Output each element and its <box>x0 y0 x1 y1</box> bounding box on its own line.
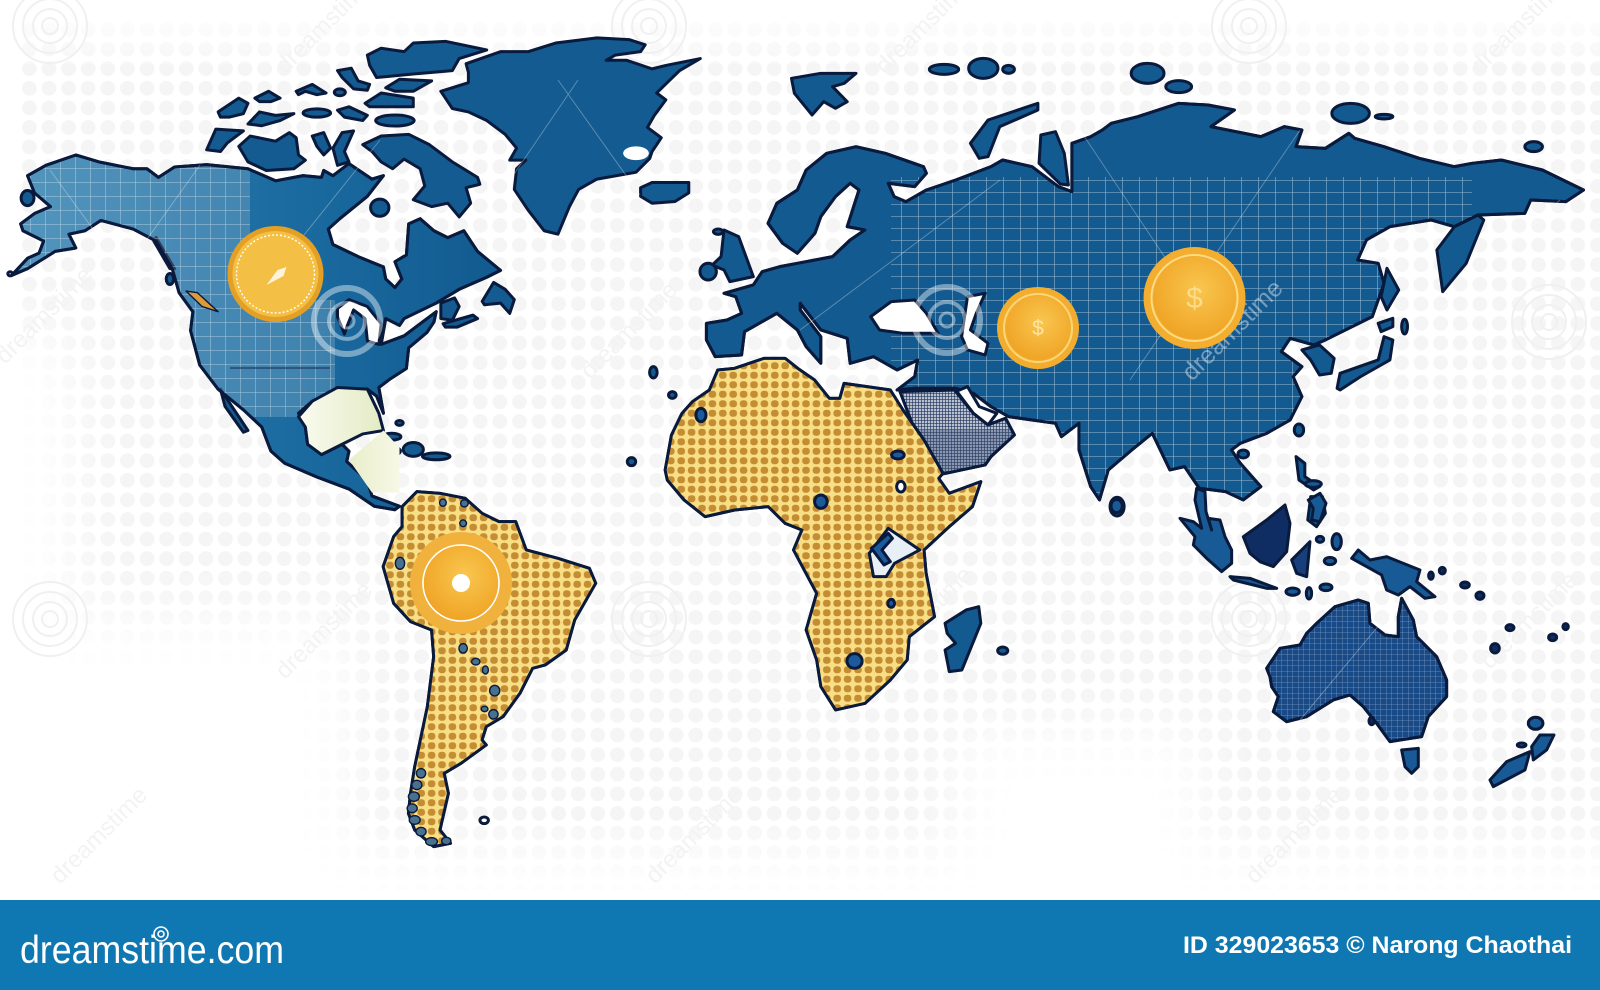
Africa dotted pattern <box>666 360 978 708</box>
Inland seas over Eurasia <box>706 103 1584 500</box>
coin: East Asia: $ <box>1186 282 1203 315</box>
Arabian peninsula hatch <box>902 392 1012 472</box>
South Asian islands <box>1110 424 1325 527</box>
New Zealand <box>1490 717 1554 787</box>
Newfoundland and maritime islands <box>441 282 514 327</box>
Australia outline <box>1267 598 1447 742</box>
Great Lakes <box>338 300 381 344</box>
watermark text on background: dreamstime <box>1475 566 1583 674</box>
South American small markers <box>395 499 500 846</box>
Arctic Eurasian islands <box>791 58 1542 152</box>
Greenland <box>441 38 700 234</box>
Australia <box>1267 598 1447 742</box>
mainland North America <box>11 155 501 510</box>
Baffin Island <box>363 134 480 217</box>
Yamal peninsula <box>1039 132 1068 185</box>
watermark text on Eurasia: dreamstime <box>1176 274 1289 386</box>
Africa and South America details <box>383 358 1008 847</box>
Australia fine grid <box>1269 602 1446 740</box>
South America dotted pattern <box>384 493 594 844</box>
coin: Central Asia <box>997 287 1079 369</box>
North America outline and Great Lakes <box>11 146 649 510</box>
Sulawesi <box>1292 542 1310 577</box>
watermark spiral on North America <box>314 288 380 354</box>
continent: North America and Greenland <box>8 38 700 510</box>
Caspian Sea <box>962 293 988 355</box>
Sumatra and Malay peninsula <box>1180 488 1232 572</box>
South America outline <box>383 492 596 847</box>
Central America cream region <box>349 431 400 492</box>
watermark text on background: dreamstime <box>1240 781 1348 889</box>
watermark text on background: dreamstime <box>45 781 153 889</box>
Arabia outline <box>900 390 1014 475</box>
Black Sea <box>871 300 938 333</box>
coin: Central Asia: $ <box>1032 317 1044 340</box>
coin: North America <box>228 226 324 322</box>
watermark spirals on background <box>13 0 1586 656</box>
Ocean islands <box>480 367 1008 824</box>
Southeast Asia and Oceania <box>1111 481 1568 787</box>
Lesser Sunda islands <box>1111 499 1332 599</box>
footer logo text: dreamstime.com <box>20 929 284 972</box>
Orange west coast mark <box>186 291 218 312</box>
British Isles <box>700 229 753 282</box>
Tasmania <box>1402 748 1418 773</box>
Persian Gulf <box>956 387 997 425</box>
continent: Eurasia <box>700 58 1584 527</box>
Borneo <box>1243 505 1290 567</box>
South America <box>383 492 596 847</box>
African lakes <box>696 408 920 668</box>
watermark spiral on Eurasia <box>914 287 980 353</box>
Arctic islands <box>21 41 487 216</box>
Eurasia grid overlay <box>891 177 1472 497</box>
Madagascar <box>945 607 981 672</box>
Eurasia mainland <box>706 103 1584 500</box>
Novaya Zemlya <box>970 103 1038 158</box>
continents: Africa and South America base <box>383 358 981 847</box>
North America grid overlay <box>20 150 335 417</box>
Disko island cutout <box>623 146 649 160</box>
Mexico cream region <box>298 387 383 455</box>
faint diagonal watermark lines on land <box>50 80 1560 720</box>
Japan and Sakhalin <box>1302 268 1408 390</box>
watermark text on background: dreamstime <box>870 561 978 669</box>
New Guinea <box>1352 550 1435 598</box>
watermark text on background: dreamstime <box>270 576 378 684</box>
footer credit text: ID 329023653 © Narong Chaothai <box>1183 932 1572 959</box>
coin: South America <box>410 532 512 634</box>
Kamchatka <box>1437 215 1484 292</box>
Caribbean islands <box>383 421 450 460</box>
coin: East Asia <box>1144 247 1246 349</box>
footer banner <box>0 900 1600 990</box>
watermark text on background: dreamstime <box>575 276 683 384</box>
Iceland <box>641 183 689 203</box>
Arabian peninsula outline <box>900 390 1014 475</box>
footer logo spiral <box>154 927 168 941</box>
Africa <box>665 358 981 710</box>
watermark text on background: dreamstime <box>640 781 748 889</box>
Pacific islets <box>1369 567 1568 725</box>
Philippines <box>1305 481 1341 565</box>
Pacific coast islands <box>8 238 248 432</box>
Eurasia outline <box>706 103 1584 500</box>
Africa outline <box>665 358 981 710</box>
